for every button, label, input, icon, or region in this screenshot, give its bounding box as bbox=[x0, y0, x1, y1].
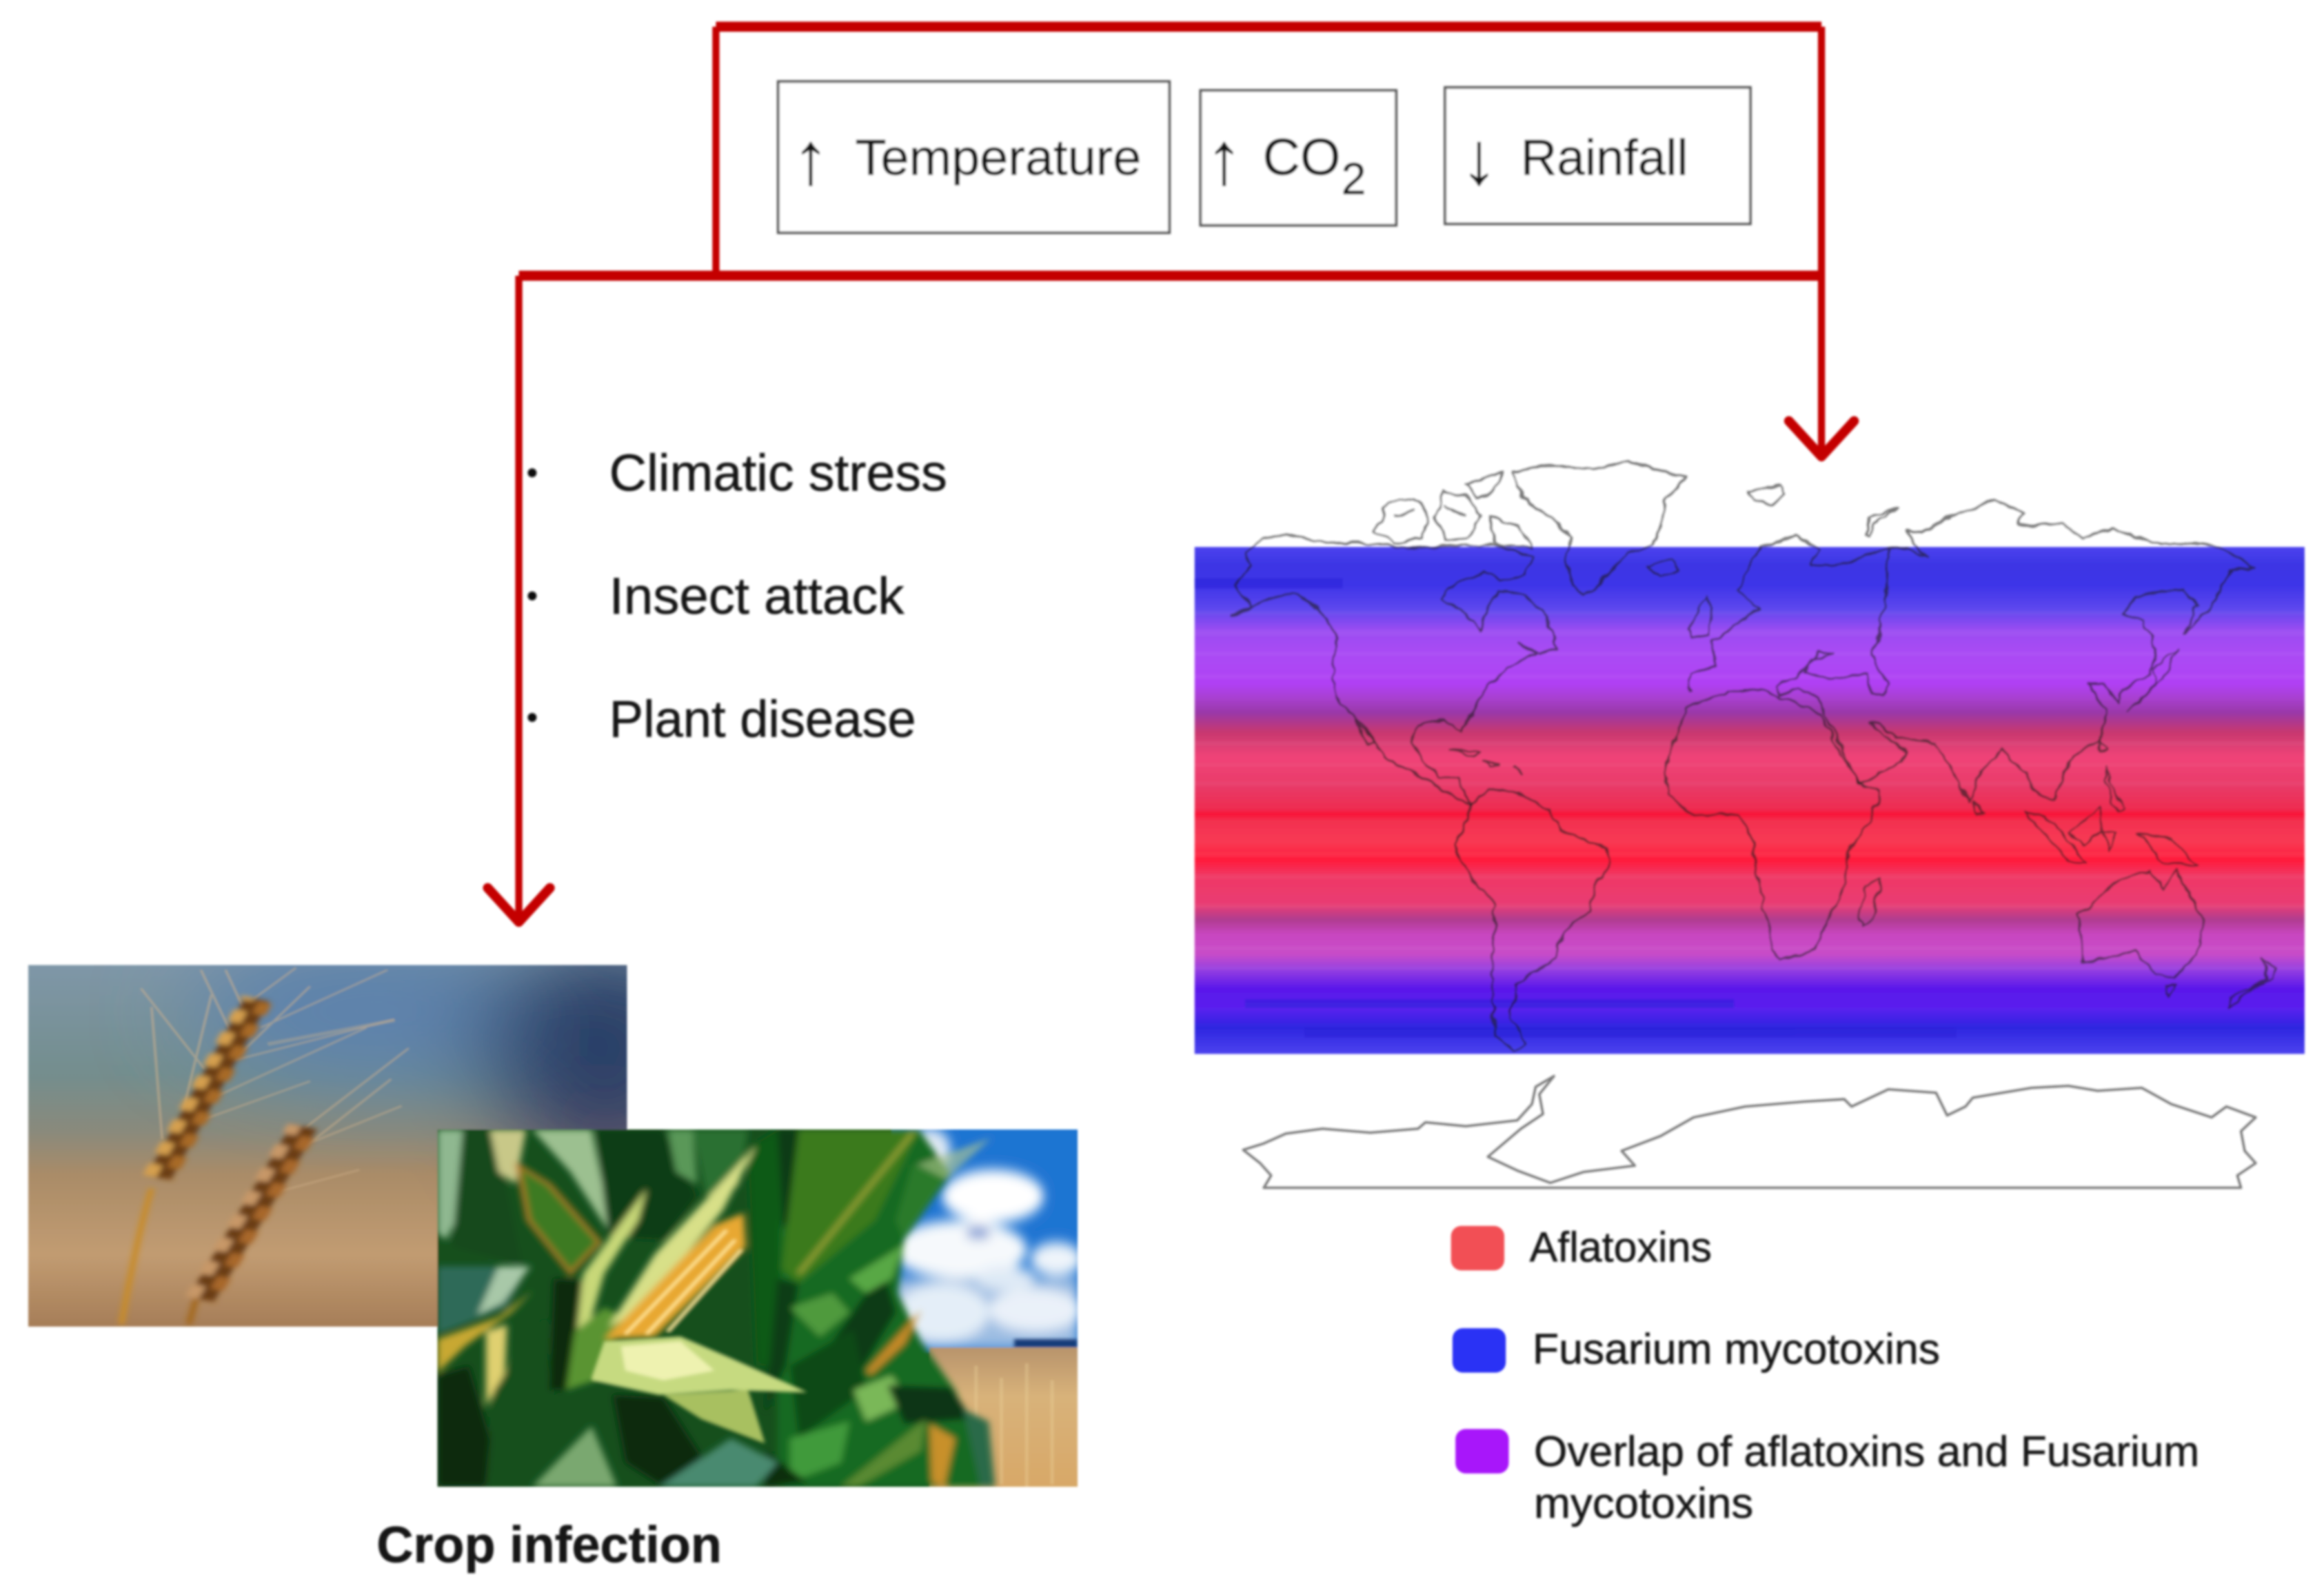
legend item: overlap bbox=[1455, 1428, 2199, 1527]
map continent outlines bbox=[1231, 462, 2274, 1187]
caption: crop infection: Crop infection bbox=[376, 1516, 722, 1574]
map colour bands bbox=[1195, 547, 2305, 1054]
box: CO2 up: ↑ bbox=[1206, 117, 1243, 200]
box: temperature up bbox=[778, 81, 1169, 232]
box: CO2 up: CO bbox=[1263, 128, 1341, 186]
text block: crop stress factors: Plant disease bbox=[609, 690, 916, 748]
legend item: aflatoxins bbox=[1451, 1223, 1712, 1270]
text block: crop stress factors: Insect attack bbox=[609, 567, 905, 625]
box: temperature up: ↑ bbox=[792, 117, 829, 200]
legend item: overlap: Overlap of aflatoxins and Fusarium bbox=[1534, 1428, 2199, 1476]
leaves bbox=[437, 1130, 995, 1487]
box: rainfall down bbox=[1445, 88, 1750, 224]
sky and field bbox=[891, 1128, 1082, 1487]
text block: crop stress factors: Climatic stress bbox=[609, 444, 947, 502]
box: rainfall down: ↓ bbox=[1461, 117, 1497, 200]
photo: maize plant and cob bbox=[437, 1128, 1082, 1487]
chart: world map of mycotoxin latitudinal bands bbox=[1195, 462, 2305, 1187]
photo: wheat ears bbox=[26, 963, 629, 1328]
box: temperature up: Temperature bbox=[856, 130, 1141, 186]
panel: climate factors frame and connector arrows bbox=[487, 27, 1854, 922]
legend bbox=[1451, 1223, 2199, 1527]
legend item: aflatoxins: Aflatoxins bbox=[1530, 1223, 1712, 1270]
legend item: fusarium mycotoxins: Fusarium mycotoxins bbox=[1533, 1326, 1940, 1374]
box: CO2 up bbox=[1200, 90, 1396, 225]
box: rainfall down: Rainfall bbox=[1521, 130, 1688, 186]
text block: crop stress factors bbox=[527, 444, 947, 748]
legend item: overlap: mycotoxins bbox=[1534, 1480, 1753, 1527]
maize cob bbox=[592, 1230, 807, 1443]
box: CO2 up: 2 bbox=[1342, 154, 1366, 204]
